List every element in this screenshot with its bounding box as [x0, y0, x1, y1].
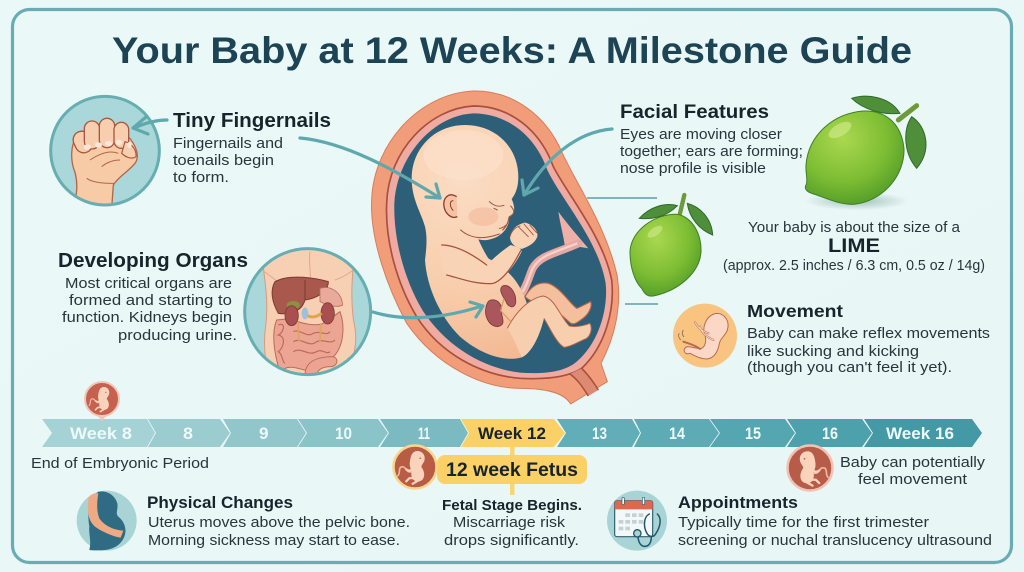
icon: pregnant silhouette — [77, 491, 137, 551]
description: screening or nuchal translucency ultrasound — [678, 533, 992, 549]
timeline labels: Week 12 — [478, 425, 546, 443]
heading: Tiny Fingernails — [173, 110, 331, 132]
amniotic fluid — [394, 113, 606, 373]
arrow: facial features to fetus — [522, 129, 612, 195]
uterine lining — [387, 106, 612, 379]
closed eye, nose and mouth — [489, 202, 514, 228]
timeline labels: 16 — [822, 425, 838, 443]
ear — [444, 195, 457, 217]
connector lines to lime — [587, 198, 658, 304]
description: toenails begin — [173, 153, 274, 169]
description: Fingernails and — [173, 136, 283, 152]
timeline labels: Week 8 — [70, 425, 132, 443]
heading: Movement — [747, 301, 843, 321]
icon: baby fist — [51, 96, 159, 208]
heading: Appointments — [678, 493, 798, 512]
icon: abdominal organs — [245, 248, 371, 378]
timeline labels: 15 — [745, 425, 761, 443]
arm outline — [442, 245, 521, 284]
timeline labels: 8 — [183, 425, 193, 443]
head highlight — [423, 130, 503, 180]
timeline — [31, 382, 986, 495]
front leg — [507, 296, 591, 357]
panel: size comparison text — [723, 220, 985, 274]
panel: central uterus and fetus illustration — [372, 91, 619, 404]
timeline labels: 9 — [259, 425, 268, 443]
panel: fetal stage — [442, 498, 582, 549]
heading: Physical Changes — [147, 493, 293, 512]
badge: 12 week fetus — [437, 455, 587, 484]
cheek — [468, 207, 498, 226]
description — [62, 276, 237, 344]
description: Morning sickness may start to ease. — [148, 533, 400, 549]
panel: size comparison text: (approx. 2.5 inches / 6.3 cm, 0.5 oz / 14g) — [723, 258, 985, 274]
description: Uterus moves above the pelvic bone. — [148, 515, 410, 531]
panel: appointments — [607, 491, 992, 551]
kidneys — [486, 285, 516, 327]
label: feel movement — [840, 455, 986, 488]
timeline labels: 11 — [418, 425, 430, 443]
panel: fetal stage: drops significantly. — [444, 533, 579, 549]
panel: physical changes — [77, 491, 410, 551]
uterus wall — [372, 91, 619, 404]
panel: tiny fingernails — [51, 96, 331, 208]
intestines — [274, 312, 343, 372]
description: function. Kidneys begin — [62, 310, 232, 326]
title: Your Baby at 12 Weeks: A Milestone Guide — [112, 30, 912, 71]
description — [173, 136, 283, 186]
description: nose profile is visible — [620, 161, 766, 177]
description: (though you can't feel it yet). — [747, 360, 952, 376]
description: Baby can make reflex movements — [747, 326, 990, 342]
label: end of embryonic period: End of Embryonic Period — [31, 456, 209, 472]
timeline labels — [70, 425, 954, 443]
label: feel movement: Baby can potentially — [840, 455, 986, 471]
icon: week 12 fetus — [394, 446, 436, 488]
description: Eyes are moving closer — [620, 127, 782, 143]
heading: Developing Organs — [58, 250, 248, 272]
panel: facial features — [620, 101, 803, 177]
icon: moving fetus — [673, 304, 737, 368]
timeline labels: 10 — [335, 425, 352, 443]
label: feel movement: feel movement — [858, 472, 967, 488]
icon: calendar and stethoscope — [607, 491, 667, 551]
liver — [272, 277, 328, 314]
icon: week 16 fetus — [788, 446, 832, 490]
cervix canal — [570, 368, 598, 396]
placenta and umbilical cord — [522, 212, 588, 293]
timeline labels: Week 16 — [886, 425, 954, 443]
jaw line — [461, 217, 509, 238]
kidneys — [285, 306, 298, 326]
description: Most critical organs are — [65, 276, 232, 292]
back leg — [525, 283, 591, 324]
description — [678, 515, 992, 549]
panel: fetal stage: Fetal Stage Begins. — [442, 498, 582, 514]
arm — [441, 245, 522, 283]
timeline segments — [42, 419, 982, 495]
icon: large lime — [805, 96, 926, 210]
arrow: organs to kidneys — [373, 302, 483, 318]
description — [620, 127, 803, 177]
badge: 12 week fetus: 12 week Fetus — [446, 460, 578, 481]
description: formed and starting to — [69, 293, 232, 309]
panel: movement — [673, 301, 990, 376]
description: producing urine. — [118, 328, 237, 344]
head and body — [412, 125, 530, 359]
arrow: fingernails to fist — [133, 117, 167, 134]
panel: fetal stage: Miscarriage risk — [453, 515, 566, 531]
description: like sucking and kicking — [747, 344, 919, 360]
panel: size comparison text: LIME — [828, 236, 880, 257]
timeline labels: 13 — [592, 425, 607, 443]
description — [148, 515, 410, 549]
panel: developing organs — [58, 248, 371, 378]
arrow: fingernails to fetus — [300, 138, 440, 198]
timeline labels: 14 — [669, 425, 686, 443]
front leg outline — [507, 296, 591, 347]
description: to form. — [173, 170, 229, 186]
description: Typically time for the first trimester — [678, 515, 929, 531]
icon: small lime — [630, 195, 713, 296]
week 12 stem — [510, 445, 514, 495]
panel: size comparison text: Your baby is about the size of a — [748, 220, 961, 236]
heading: Facial Features — [620, 101, 769, 123]
description: together; ears are forming; — [620, 144, 803, 160]
hand — [510, 223, 537, 249]
icon: week 8 embryo — [85, 382, 119, 421]
description — [747, 326, 990, 376]
